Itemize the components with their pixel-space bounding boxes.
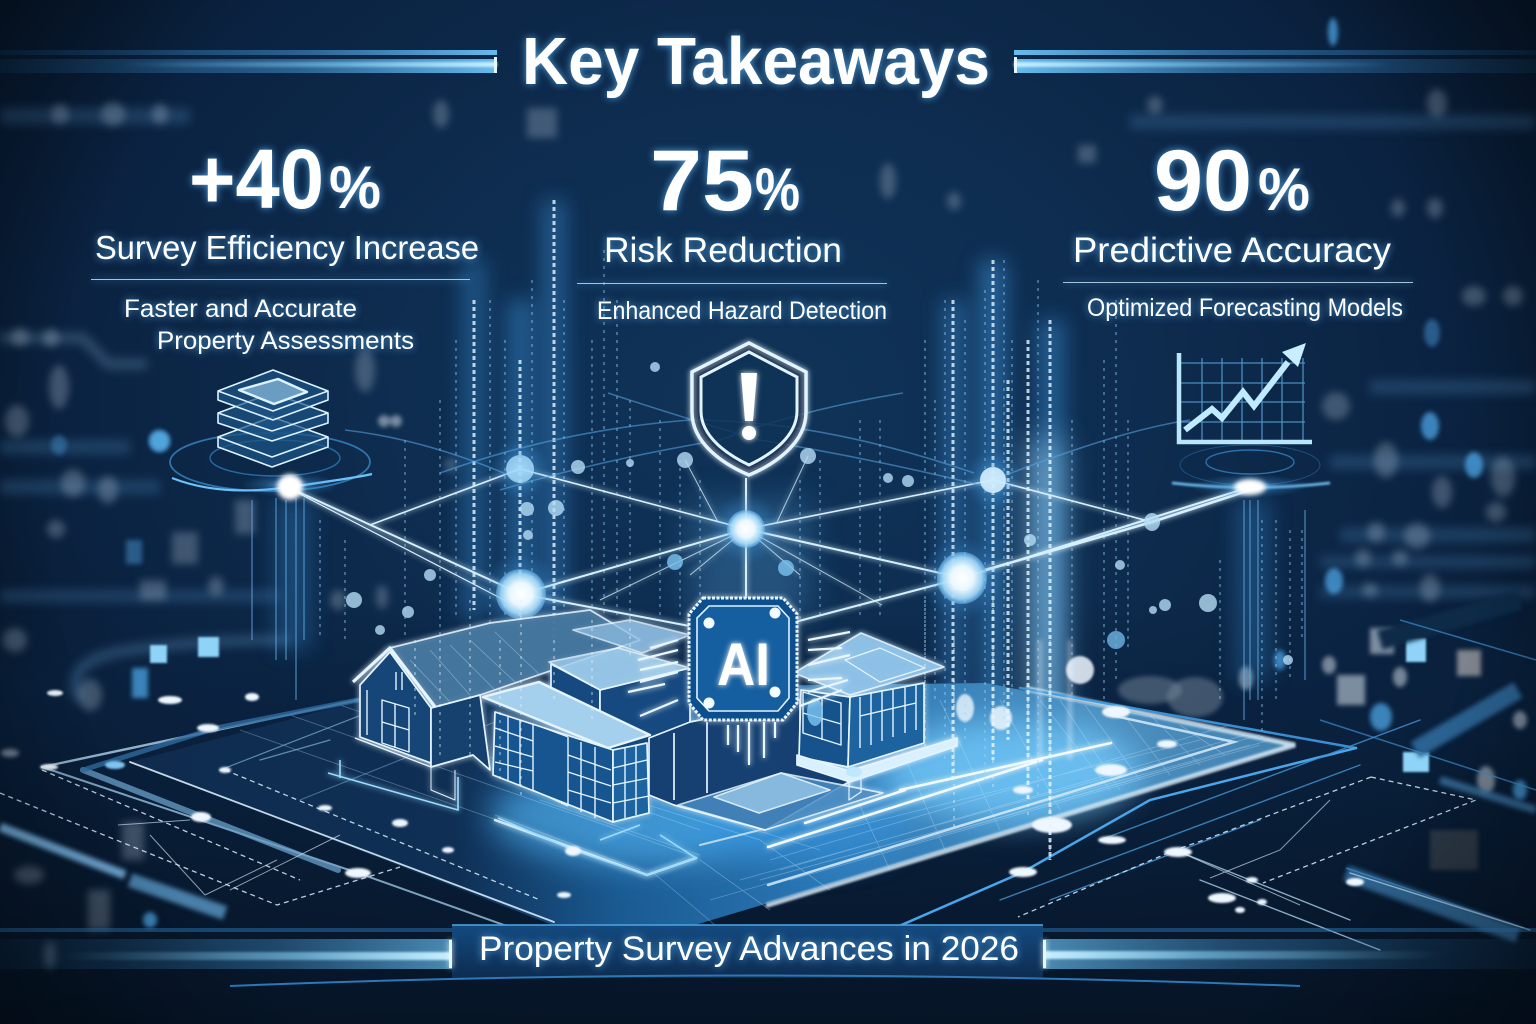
lower bokeh: pale [1, 415, 1527, 870]
footer text: Property Survey Advances in 2026 [479, 930, 1019, 968]
AI chip [628, 598, 850, 765]
stat divider [577, 283, 887, 284]
stat column: predictive accuracy [1063, 133, 1413, 322]
stat value: +40 [189, 132, 324, 226]
data rain behind building [252, 200, 1305, 860]
stat divider [91, 279, 470, 280]
icon: growth chart [1179, 343, 1312, 442]
top banner bars [0, 50, 1536, 73]
stat column: risk reduction [577, 133, 887, 325]
stat description line 2: Property Assessments [157, 327, 414, 355]
floor plate: blueprint base [0, 656, 1530, 950]
stat column: survey efficiency [91, 132, 479, 355]
chip data pins [628, 632, 850, 765]
blurred horizontal bands [0, 108, 1536, 700]
right side dark plates [0, 600, 1536, 935]
center-left glazed wing [483, 682, 650, 822]
house: left gable [353, 610, 640, 800]
flare: left [150, 431, 372, 500]
node flecks [40, 656, 1364, 913]
stat divider [1063, 282, 1413, 283]
dashed survey outlines [0, 770, 1476, 917]
stat value: 75 [650, 133, 754, 229]
footer banner [0, 924, 1536, 986]
icon: shield warning [692, 343, 806, 475]
stat value: 90 [1154, 133, 1252, 229]
stat description: Faster and Accurate [124, 295, 357, 323]
stat unit: % [1258, 156, 1310, 223]
icon: stacked layers [218, 370, 328, 467]
upper roof slabs [549, 620, 690, 800]
stat description: Enhanced Hazard Detection [597, 297, 887, 325]
center-front block and steps [649, 700, 883, 830]
right wing [794, 633, 957, 800]
network connections [290, 456, 1250, 628]
flare: right [1172, 445, 1330, 498]
chip label: AI [717, 631, 770, 698]
stat description: Optimized Forecasting Models [1087, 294, 1403, 322]
data rain overlay [415, 600, 1050, 860]
outer traces [42, 688, 1530, 950]
stat heading: Risk Reduction [604, 231, 842, 270]
stat unit: % [329, 154, 381, 221]
stat heading: Predictive Accuracy [1073, 231, 1392, 270]
title: Key Takeaways [522, 24, 990, 99]
network nodes [346, 362, 1293, 665]
stat unit: % [755, 156, 800, 223]
light column glows [275, 200, 1271, 740]
left porch [328, 760, 696, 875]
3D property building [353, 610, 957, 830]
bright cyan blocks [150, 637, 1429, 772]
stat heading: Survey Efficiency Increase [95, 229, 479, 266]
plate frame strokes [130, 689, 1295, 922]
faint arcs [345, 393, 1190, 490]
blueprint grid [240, 700, 1270, 925]
